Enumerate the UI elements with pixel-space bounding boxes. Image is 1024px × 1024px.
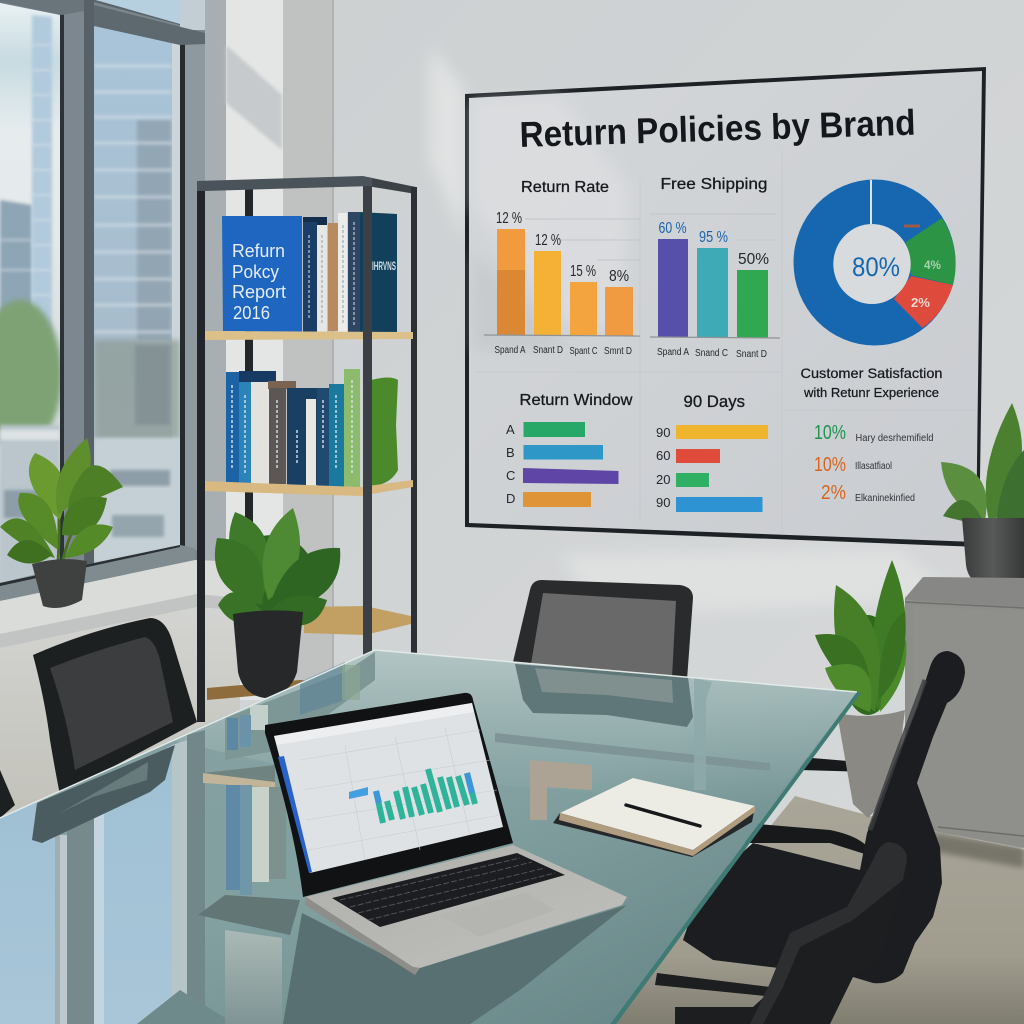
free shipping chart: Free Shipping [660, 176, 768, 193]
right glass pane [94, 25, 180, 563]
mirrored middle chair [515, 664, 693, 727]
return window chart: D [506, 491, 515, 506]
return rate chart: Spand A [494, 345, 526, 356]
table reflections [0, 652, 770, 1024]
book: Return Policy Report: Pokcy [232, 262, 279, 282]
book: Return Policy Report [222, 216, 302, 332]
plant on window sill [0, 438, 123, 608]
donut chart: 80% [852, 252, 900, 282]
far right chair [683, 651, 965, 983]
laptop screen [265, 693, 513, 897]
return window chart [506, 392, 633, 507]
free shipping chart: Spand A [657, 347, 689, 358]
book: Return Policy Report: Refurn [232, 241, 285, 261]
customer satisfaction block: 10% [814, 422, 846, 444]
customer satisfaction block: 10% [814, 454, 846, 476]
mirrored shelf and books [198, 652, 375, 1024]
floor [610, 796, 1024, 1024]
customer satisfaction block: Hary desrhemifield [856, 433, 934, 444]
right plant pot [962, 518, 1024, 587]
plant on shelf [215, 508, 340, 698]
customer satisfaction block: with Retunr Experience [803, 385, 939, 400]
return window chart: B [506, 445, 515, 460]
return rate chart: Spant C [570, 346, 598, 357]
customer satisfaction block: Customer Satisfaction [800, 365, 942, 381]
cabinet [905, 577, 1024, 848]
shelf 1 books [222, 212, 397, 333]
window [0, 0, 205, 601]
customer satisfaction block [800, 365, 942, 504]
book: Return Policy Report: 2016 [233, 303, 270, 323]
free shipping chart [650, 176, 780, 360]
shelf 2 books and green vase [226, 369, 398, 487]
plant right on cabinet [941, 403, 1024, 587]
wall board [465, 67, 986, 547]
return rate chart [484, 179, 640, 357]
green vase [371, 378, 398, 486]
window sill and lower wall [0, 560, 250, 840]
donut chart [794, 180, 956, 346]
donut chart: 4% [924, 258, 941, 272]
customer satisfaction block: 2% [821, 482, 846, 504]
mirrored window [0, 730, 235, 1024]
return rate chart: 12 % [535, 232, 561, 249]
return rate chart: Snant D [533, 345, 563, 356]
arm rests [745, 757, 885, 860]
glass table [0, 650, 861, 1024]
bookshelf front frame [197, 176, 372, 722]
middle chair back [513, 580, 693, 680]
return rate chart: Return Rate [521, 179, 609, 196]
return rate chart: 15 % [570, 263, 596, 280]
return rate chart: 12 % [496, 210, 522, 227]
left mesh chair [0, 618, 197, 818]
free shipping chart: 50% [738, 251, 769, 268]
board title: Return Policies by Brand [519, 102, 916, 155]
90 days chart [656, 392, 768, 512]
return window chart: A [506, 422, 515, 437]
free shipping chart: 95 % [699, 229, 728, 246]
90 days chart: 90 [656, 495, 670, 510]
laptop bar chart [376, 769, 475, 823]
notebook and pen [553, 778, 755, 857]
pen [626, 805, 700, 826]
shelf boards [203, 331, 413, 700]
front chair [655, 842, 907, 1024]
90 days chart: 20 [656, 472, 670, 487]
table plant pot [837, 710, 905, 818]
mirrored left chair [32, 745, 175, 843]
90 days chart: 90 Days [684, 392, 745, 411]
return window chart: Return Window [520, 392, 633, 409]
table plant [815, 560, 906, 818]
laptop [265, 693, 627, 975]
left glass pane [0, 3, 62, 583]
window frame [0, 0, 205, 601]
return window chart: C [506, 468, 515, 483]
customer satisfaction block: Illasatfiaol [855, 461, 892, 472]
sill plant pot [32, 559, 87, 608]
free shipping chart: Snant D [736, 349, 767, 360]
right chairs behind table [683, 560, 965, 983]
free shipping chart: Snand C [695, 348, 728, 359]
customer satisfaction block: Elkaninekinfied [855, 493, 915, 504]
shelf 1 books: IHRVNS [372, 259, 396, 273]
donut chart: 2% [911, 295, 930, 310]
90 days chart: 60 [656, 448, 670, 463]
90 days chart: 90 [656, 425, 670, 440]
free shipping chart: 60 % [658, 220, 686, 237]
return rate chart: Smnt D [604, 346, 632, 357]
return rate chart: 8% [609, 268, 629, 285]
bookshelf back posts [245, 177, 417, 657]
shelf plant pot [233, 610, 303, 698]
book: Return Policy Report: Report [232, 282, 286, 302]
